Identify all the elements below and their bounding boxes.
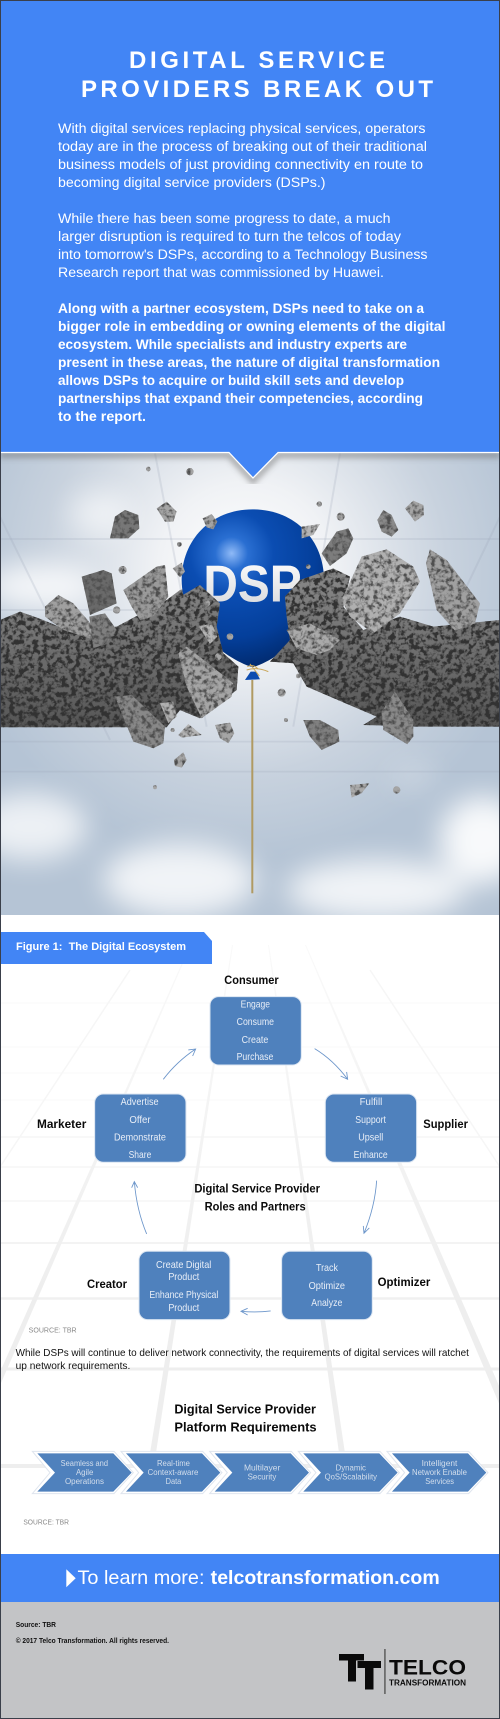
box: creator: Enhance Physical [149, 1290, 218, 1301]
box: optimizer: Optimize [309, 1281, 345, 1292]
call to action text: To learn more: [78, 1567, 204, 1589]
wall in front of balloon [150, 585, 238, 718]
box: marketer [95, 1094, 186, 1162]
chevron 3: Security [248, 1472, 277, 1482]
chart: digital ecosystem cycle [29, 973, 468, 1335]
chevron 2: Data [166, 1476, 182, 1486]
bold intro paragraph: bigger role in embedding or owning elements of the digital [58, 319, 446, 334]
chevron 5: Intelligent [422, 1458, 458, 1468]
header pointer arrow [0, 451, 500, 481]
chevron 2 [121, 1451, 222, 1494]
figure 1 tab heading: Figure 1: The Digital Ecosystem [16, 941, 186, 953]
paragraph: up network requirements. [16, 1361, 130, 1372]
balloon [182, 509, 324, 893]
chevron 4: QoS/Scalability [325, 1472, 378, 1482]
copyright: © 2017 Telco Transformation. All rights reserved. [16, 1636, 169, 1645]
bold intro paragraph: present in these areas, the nature of digital transformation [58, 355, 440, 370]
title: DIGITAL SERVICE [129, 47, 385, 74]
sky grid lines [0, 453, 500, 772]
figure 1 tab heading [1, 932, 212, 964]
bold intro paragraph [58, 301, 446, 424]
label: consumer: Consumer [224, 973, 279, 987]
chevron 2: Real-time [157, 1458, 190, 1468]
bold intro paragraph: allows DSPs to acquire or build skill sets and develop [58, 373, 404, 388]
heading: Platform Requirements [174, 1419, 317, 1434]
intro paragraph 2: larger disruption is required to turn the telcos of today [58, 229, 401, 244]
cycle arrows [132, 1049, 377, 1315]
bold intro paragraph: to the report. [58, 409, 146, 424]
bold intro paragraph: Along with a partner ecosystem, DSPs need to take on a [58, 301, 425, 316]
box: optimizer: Analyze [311, 1298, 343, 1309]
box: marketer: Demonstrate [114, 1132, 166, 1143]
bold intro paragraph: ecosystem. While specialists and industry experts are [58, 337, 407, 352]
intro paragraph 1: business models of just providing connectivity en route to [58, 157, 423, 172]
box: creator [139, 1251, 230, 1320]
rock debris [45, 467, 480, 798]
intro paragraph 2: While there has been some progress to date, a much [58, 211, 391, 226]
call to action text [78, 1567, 440, 1589]
box: supplier: Support [355, 1115, 386, 1126]
chevron 4 [298, 1451, 399, 1494]
box: supplier: Fulfill [360, 1097, 382, 1108]
balloon: DSP [203, 556, 302, 614]
box: consumer [210, 997, 301, 1065]
chevron 2: Context-aware [148, 1467, 199, 1477]
box: marketer: Advertise [121, 1097, 159, 1108]
box: supplier: Enhance [354, 1150, 388, 1161]
source note: SOURCE: TBR [23, 1518, 69, 1527]
chevron 5 [387, 1451, 488, 1494]
box: supplier: Upsell [358, 1132, 383, 1143]
box: consumer: Engage [241, 999, 270, 1010]
box: consumer: Create [242, 1035, 269, 1046]
platform requirements section [16, 1348, 488, 1527]
chevron 3 [210, 1451, 311, 1494]
label: optimizer: Optimizer [378, 1275, 430, 1289]
icon: play arrow [66, 1569, 76, 1587]
bold intro paragraph: partnerships that expand their competencies, according [58, 391, 423, 406]
call to action text: telcotransformation.com [211, 1567, 440, 1589]
intro paragraph 2 [58, 211, 428, 280]
hero illustration: balloon breaking through wall [0, 453, 500, 920]
logo: telco transformation: TELCO [389, 1656, 466, 1680]
heading: Digital Service Provider [174, 1401, 316, 1416]
call to action bar [0, 1554, 500, 1602]
title: PROVIDERS BREAK OUT [81, 76, 433, 103]
box: creator: Create Digital [156, 1260, 211, 1271]
chevron 5: Network Enable [412, 1467, 467, 1477]
footer panel [0, 1602, 500, 1719]
box: marketer: Share [129, 1150, 152, 1161]
center label: Roles and Partners [205, 1200, 306, 1214]
heading [174, 1401, 317, 1434]
chevron 1: Operations [65, 1476, 104, 1486]
center label: Digital Service Provider [194, 1182, 320, 1196]
intro paragraph 1: With digital services replacing physical services, operators [58, 121, 426, 136]
chevron 1: Seamless and [61, 1458, 108, 1468]
chevron 3: Multilayer [244, 1463, 281, 1473]
box: creator: Product [168, 1272, 199, 1283]
box: consumer: Purchase [237, 1052, 274, 1063]
header panel [0, 0, 500, 453]
box: optimizer [282, 1251, 372, 1320]
wall left section [0, 585, 238, 727]
box: supplier [325, 1094, 417, 1162]
logo: telco transformation: TRANSFORMATION [389, 1678, 466, 1688]
intro paragraph 1 [58, 121, 427, 190]
intro paragraph 1: becoming digital service providers (DSPs.) [58, 175, 326, 190]
label: supplier: Supplier [423, 1117, 468, 1131]
center label [194, 1182, 320, 1214]
box: creator: Product [168, 1303, 199, 1314]
source line: Source: TBR [16, 1620, 57, 1629]
label: creator: Creator [87, 1277, 127, 1291]
sky clouds [0, 493, 500, 920]
chevron 4: Dynamic [336, 1463, 366, 1473]
intro paragraph 2: into tomorrow's DSPs, according to a Technology Business [58, 247, 428, 262]
paragraph: While DSPs will continue to deliver network connectivity, the requirements of digital services will ratchet [16, 1348, 469, 1359]
figure section background lines [0, 915, 500, 1555]
chevron 5: Services [425, 1476, 454, 1486]
intro paragraph 2: Research report that was commissioned by Huawei. [58, 265, 384, 280]
intro paragraph 1: today are in the process of breaking out of their traditional [58, 139, 427, 154]
box: marketer: Offer [129, 1115, 151, 1126]
box: optimizer: Track [316, 1263, 339, 1274]
source note: SOURCE: TBR [29, 1326, 77, 1335]
chevron 1: Agile [76, 1467, 94, 1477]
title [81, 47, 433, 103]
paragraph [16, 1348, 469, 1372]
box: consumer: Consume [237, 1017, 274, 1028]
chevron 1 [32, 1451, 133, 1494]
label: marketer: Marketer [37, 1117, 87, 1131]
logo: telco transformation [339, 1649, 466, 1694]
